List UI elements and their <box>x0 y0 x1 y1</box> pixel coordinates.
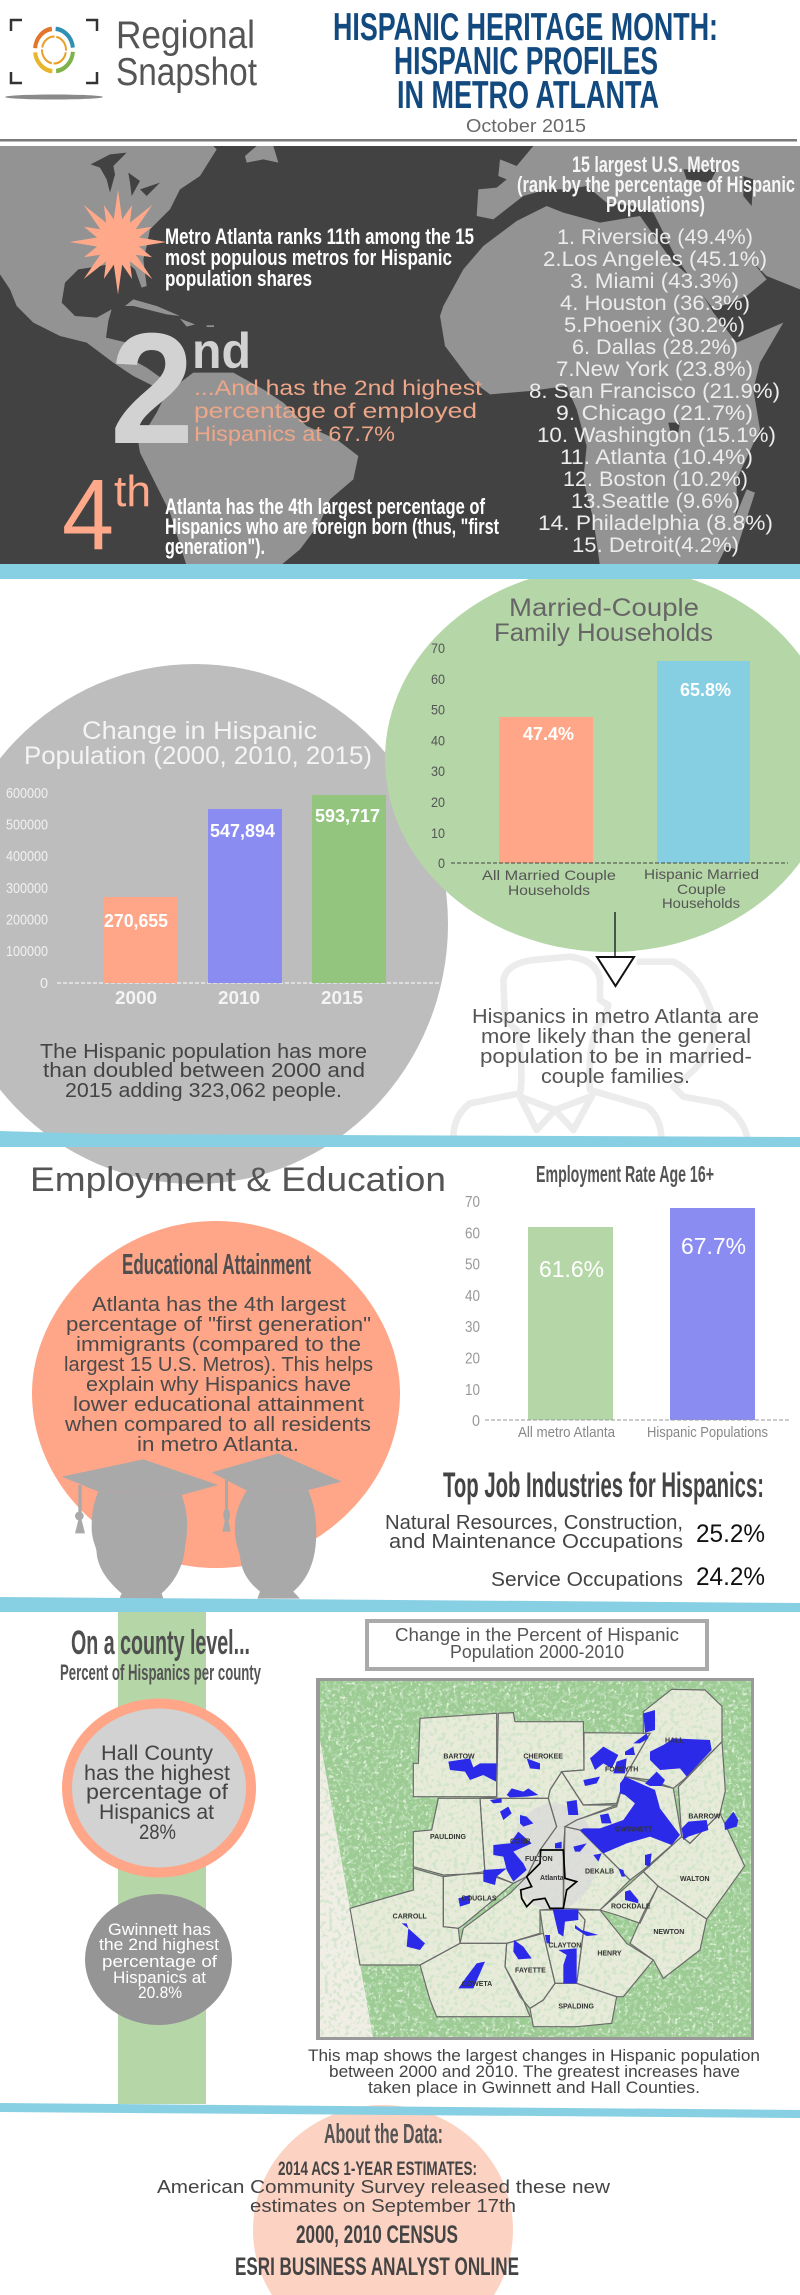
bar chart: hispanic population: 500000 <box>6 817 48 834</box>
bar chart: hispanic population: 100000 <box>6 943 48 960</box>
bar chart: employment rate: 70 <box>465 1194 480 1211</box>
bar chart: hispanic population: 300000 <box>6 880 48 897</box>
heading: change in hispanic population: Change in Hispanic <box>82 717 317 745</box>
map title box: Change in the Percent of Hispanic <box>395 1625 679 1645</box>
text: foreign born <box>165 494 499 559</box>
bar: 2015 <box>312 795 386 983</box>
bar chart: employment rate: 30 <box>465 1319 480 1336</box>
map: change in hispanic population by county: NEWTON <box>653 1929 684 1936</box>
bar chart: hispanic population: 2015 <box>321 988 363 1008</box>
bar chart: married-couple households: Hispanic Married <box>644 866 759 882</box>
map: change in hispanic population by county: FAYETTE <box>515 1968 546 1975</box>
bar chart: married-couple households: 60 <box>431 671 445 687</box>
title: IN METRO ATLANTA <box>397 74 659 117</box>
list: metro ranking: 15. Detroit(4.2%) <box>572 534 739 557</box>
icon: graduates silhouettes <box>62 1453 342 1599</box>
map: change in hispanic population by county: Atlanta <box>540 1875 564 1882</box>
list: metro ranking: 9. Chicago (21.7%) <box>556 402 753 425</box>
map: change in hispanic population by county: DOUGLAS <box>462 1896 497 1903</box>
callout: hall county: Hispanics at <box>99 1801 214 1824</box>
text: acs estimates <box>157 2159 611 2216</box>
text: attainment paragraph: explain why Hispanics have <box>86 1374 351 1396</box>
text: more likely married: couple families. <box>541 1066 690 1088</box>
bar chart: married-couple households: 70 <box>431 640 445 656</box>
text: more likely married: more likely than the general <box>481 1026 751 1048</box>
heading: on a county level: Percent of Hispanics per county <box>60 1660 261 1685</box>
bar chart: married-couple households: Couple <box>677 881 726 897</box>
bar: all married couple <box>499 717 593 863</box>
list: metro ranking: 12. Boston (10.2%) <box>563 468 748 491</box>
heading: married-couple households <box>494 594 713 647</box>
text: map caption <box>308 2046 760 2097</box>
panel: world map background <box>0 146 800 566</box>
text: map caption: taken place in Gwinnett and Hall Counties. <box>368 2078 700 2097</box>
icon: corner brackets <box>11 20 97 83</box>
map: change in hispanic population by county: FULTON <box>525 1856 553 1863</box>
map: change in hispanic population by county: HENRY <box>597 1950 622 1957</box>
map: change in hispanic population by county: HALL <box>665 1738 684 1745</box>
text: foreign born: Hispanics who are foreign born (thus, "first <box>165 514 499 539</box>
divider band <box>0 564 800 579</box>
stat: service occupations <box>491 1563 765 1591</box>
callout: gwinnett: Hispanics at <box>113 1968 206 1987</box>
text: metro atlanta ranks 11th: Metro Atlanta ranks 11th among the 15 <box>165 224 474 249</box>
icon: coloured rings <box>33 27 75 73</box>
panel: educational attainment egg <box>32 1221 400 1568</box>
text: attainment paragraph: in metro Atlanta. <box>137 1434 299 1456</box>
bar chart: married-couple households: 50 <box>431 702 445 718</box>
stat: 4th: 4 <box>62 459 114 571</box>
callout: gwinnett: Gwinnett has <box>108 1920 211 1939</box>
bar chart: employment rate: 10 <box>465 1382 480 1399</box>
text: esri source: ESRI BUSINESS ANALYST ONLINE <box>235 2253 519 2281</box>
map: change in hispanic population by county: GWINNETT <box>615 1827 653 1834</box>
map: change in hispanic population by county: PAULDING <box>430 1834 466 1841</box>
stat: service occupations: 24.2% <box>696 1563 765 1591</box>
stat: 4th <box>62 459 151 571</box>
heading: employment and education: Employment & Education <box>30 1161 446 1199</box>
stat: 2nd: 2 <box>110 301 194 477</box>
map: change in hispanic population by county: CHEROKEE <box>523 1754 563 1761</box>
bar chart: married-couple households <box>431 640 788 911</box>
stat: natural resources <box>385 1512 765 1553</box>
bar chart: employment rate: 0 <box>472 1413 480 1430</box>
text: 2nd highest employed: percentage of employed <box>194 400 477 423</box>
map: change in hispanic population by county: BARTOW <box>443 1753 475 1760</box>
bar chart: employment rate: 40 <box>465 1288 480 1305</box>
callout: gwinnett: percentage of <box>102 1952 217 1971</box>
map: change in hispanic population by county: DEKALB <box>585 1868 614 1875</box>
stat: natural resources: and Maintenance Occupations <box>389 1531 683 1553</box>
callout: hall county <box>67 1704 251 1872</box>
bar chart: employment rate <box>465 1194 790 1441</box>
bar chart: married-couple households: 20 <box>431 794 445 810</box>
bar chart: hispanic population: 2010 <box>218 988 260 1008</box>
callout: gwinnett: the 2nd highest <box>99 1935 219 1954</box>
stat: natural resources: Natural Resources, Construction, <box>385 1512 683 1534</box>
text: foreign born: generation"). <box>165 534 265 559</box>
map: change in hispanic population by county: CARROLL <box>393 1913 428 1920</box>
map: change in hispanic population by county: BARROW <box>688 1814 721 1821</box>
divider band <box>0 1597 800 1612</box>
bar chart: employment rate: 67.7% <box>681 1233 746 1259</box>
text: acs estimates: American Community Survey released these new <box>157 2177 611 2197</box>
bar chart: employment rate: 50 <box>465 1257 480 1274</box>
callout: gwinnett: 20.8% <box>138 1983 182 2002</box>
bar: hispanic populations <box>670 1208 755 1420</box>
bar chart: married-couple households: 30 <box>431 763 445 779</box>
bar chart: married-couple households: 0 <box>438 855 445 871</box>
bar chart: married-couple households: 10 <box>431 825 445 841</box>
list: metro ranking: 11. Atlanta (10.4%) <box>560 446 753 469</box>
text: attainment paragraph: immigrants (compared to the <box>76 1334 361 1356</box>
icon: ghost couple outline <box>453 957 748 1143</box>
callout: hall county: Hall County <box>101 1742 214 1765</box>
heading: 15 largest metros: 15 largest U.S. Metros <box>572 152 740 177</box>
map: change in hispanic population by county: CLAYTON <box>548 1943 581 1950</box>
title: HISPANIC PROFILES <box>394 40 658 83</box>
text: attainment paragraph: percentage of "first generation" <box>66 1314 371 1336</box>
text: attainment paragraph: largest 15 U.S. Metros). This helps <box>64 1354 373 1376</box>
bar chart: employment rate: 61.6% <box>539 1256 604 1282</box>
bar chart: employment rate: 60 <box>465 1225 480 1242</box>
callout: hall county: 28% <box>139 1821 176 1844</box>
bar chart: married-couple households: All Married Couple <box>482 867 616 883</box>
text: metro atlanta ranks 11th <box>165 224 474 291</box>
list: metro ranking: 6. Dallas (28.2%) <box>572 336 738 359</box>
list: metro ranking: 3. Miami (43.3%) <box>570 270 739 293</box>
stat: 2nd <box>110 301 251 477</box>
text: map caption: This map shows the largest changes in Hispanic population <box>308 2046 760 2065</box>
map: change in hispanic population by county: ROCKDALE <box>611 1903 651 1910</box>
text: 2nd highest employed: Hispanics at 67.7% <box>194 423 395 446</box>
icon: orange starburst <box>70 190 166 294</box>
bar chart: married-couple households: 65.8% <box>680 680 731 700</box>
bar chart: hispanic population: 547,894 <box>210 821 275 841</box>
logo wordmark <box>116 14 257 94</box>
list: metro ranking: 5.Phoenix (30.2%) <box>564 314 745 337</box>
callout: hall county: has the highest <box>84 1762 230 1785</box>
divider band <box>0 2103 800 2118</box>
list: metro ranking <box>529 226 780 557</box>
text: foreign born: Atlanta has the 4th largest percentage of <box>165 494 486 519</box>
date: October 2015 <box>466 116 586 136</box>
stat: 4th: th <box>114 467 151 516</box>
heading: married-couple households: Married-Couple <box>509 594 699 622</box>
map: change in hispanic population by county: FORSYTH <box>605 1767 638 1774</box>
bar: 2010 <box>208 809 282 983</box>
text: 2nd highest employed <box>194 377 482 446</box>
logo: Regional Snapshot <box>5 14 257 100</box>
list: metro ranking: 13.Seattle (9.6%) <box>571 490 740 513</box>
list: metro ranking: 8. San Francisco (21.9%) <box>529 380 780 403</box>
panel: population circle <box>0 664 448 1184</box>
callout: gwinnett <box>85 1894 232 2025</box>
text: acs estimates: 2014 ACS 1-YEAR ESTIMATES: <box>278 2159 477 2180</box>
stat: natural resources: 25.2% <box>696 1520 765 1548</box>
text: more likely married: population to be in married- <box>480 1046 752 1068</box>
list: metro ranking: 1. Riverside (49.4%) <box>557 226 753 249</box>
heading: 15 largest metros <box>517 152 795 217</box>
bar: 2000 <box>104 897 177 983</box>
stat: service occupations: Service Occupations <box>491 1569 683 1591</box>
text: more likely married: Hispanics in metro Atlanta are <box>472 1006 759 1028</box>
bar: hispanic married couple <box>657 661 750 863</box>
map: change in hispanic population by county: COBB <box>510 1838 531 1845</box>
bar chart: employment rate: All metro Atlanta <box>518 1424 616 1441</box>
text: attainment paragraph <box>64 1294 373 1456</box>
map title box: Population 2000-2010 <box>450 1642 624 1662</box>
bar chart: married-couple households: 47.4% <box>523 724 574 744</box>
map: change in hispanic population by county: SPALDING <box>558 2003 594 2010</box>
heading: on a county level: On a county level... <box>71 1624 250 1662</box>
text: map caption: between 2000 and 2010. The greatest increases have <box>329 2062 740 2081</box>
bar chart: hispanic population: 600000 <box>6 785 48 802</box>
bar chart: hispanic population: 200000 <box>6 911 48 928</box>
text: population doubled: 2015 adding 323,062 people. <box>65 1080 342 1102</box>
text: attainment paragraph: Atlanta has the 4th largest <box>92 1294 346 1316</box>
bar chart: hispanic population: 400000 <box>6 848 48 865</box>
heading: about the data: About the Data: <box>324 2118 443 2149</box>
heading: 15 largest metros: Populations) <box>606 192 705 217</box>
text: population doubled: The Hispanic population has more <box>40 1041 367 1063</box>
map: change in hispanic population by county: COWETA <box>462 1981 492 1988</box>
list: metro ranking: 14. Philadelphia (8.8%) <box>538 512 773 535</box>
text: more likely married <box>472 1006 759 1088</box>
bar chart: hispanic population: 270,655 <box>104 911 168 931</box>
logo shadow <box>5 94 103 100</box>
text: census source: 2000, 2010 CENSUS <box>296 2221 458 2249</box>
map: change in hispanic population by county <box>316 1678 754 2040</box>
heading: educational attainment: Educational Attainment <box>122 1249 311 1281</box>
text: 2nd highest employed: ...And has the 2nd highest <box>194 377 482 400</box>
callout: hall county: percentage of <box>86 1781 228 1804</box>
list: metro ranking: 7.New York (23.8%) <box>556 358 753 381</box>
heading: change in hispanic population <box>24 717 372 770</box>
text: attainment paragraph: lower educational attainment <box>73 1394 364 1416</box>
bar: all metro atlanta <box>528 1227 613 1420</box>
bar chart: hispanic population: 593,717 <box>315 806 380 826</box>
panel: married-couple circle <box>385 566 800 952</box>
heading: married-couple households: Family Households <box>494 619 713 647</box>
heading: on a county level <box>60 1624 261 1685</box>
title <box>333 6 718 117</box>
text: acs estimates: estimates on September 17th <box>250 2196 516 2216</box>
stat: 2nd: nd <box>192 323 251 379</box>
bar chart: hispanic population <box>6 785 439 1008</box>
heading: change in hispanic population: Population (2000, 2010, 2015) <box>24 742 372 770</box>
divider band <box>0 1131 800 1147</box>
map: change in hispanic population by county: WALTON <box>680 1876 710 1883</box>
bar chart: married-couple households: Households <box>508 882 590 898</box>
logo wordmark: Regional <box>116 14 255 57</box>
green vertical strip <box>118 1612 206 2104</box>
text: attainment paragraph: when compared to all residents <box>64 1414 371 1436</box>
text: metro atlanta ranks 11th: population shares <box>165 266 312 291</box>
bar chart: hispanic population: 2000 <box>115 988 157 1008</box>
list: metro ranking: 10. Washington (15.1%) <box>537 424 776 447</box>
list: metro ranking: 2.Los Angeles (45.1%) <box>543 248 767 271</box>
bar chart: married-couple households: Households <box>662 895 740 911</box>
logo wordmark: Snapshot <box>116 51 257 94</box>
bar chart: employment rate: 20 <box>465 1350 480 1368</box>
bar chart: employment rate: Hispanic Populations <box>647 1424 768 1441</box>
bar chart: married-couple households: 40 <box>431 732 445 748</box>
text: population doubled <box>40 1041 367 1102</box>
text: population doubled: than doubled between 2000 and <box>43 1060 365 1082</box>
bar chart: hispanic population: 0 <box>40 975 48 992</box>
text: metro atlanta ranks 11th: most populous metros for Hispanic <box>165 245 452 270</box>
panel: about the data circle <box>253 2105 513 2295</box>
list: metro ranking: 4. Houston (36.3%) <box>560 292 750 315</box>
map title box <box>367 1621 707 1669</box>
arrow: down to statement <box>597 912 634 986</box>
